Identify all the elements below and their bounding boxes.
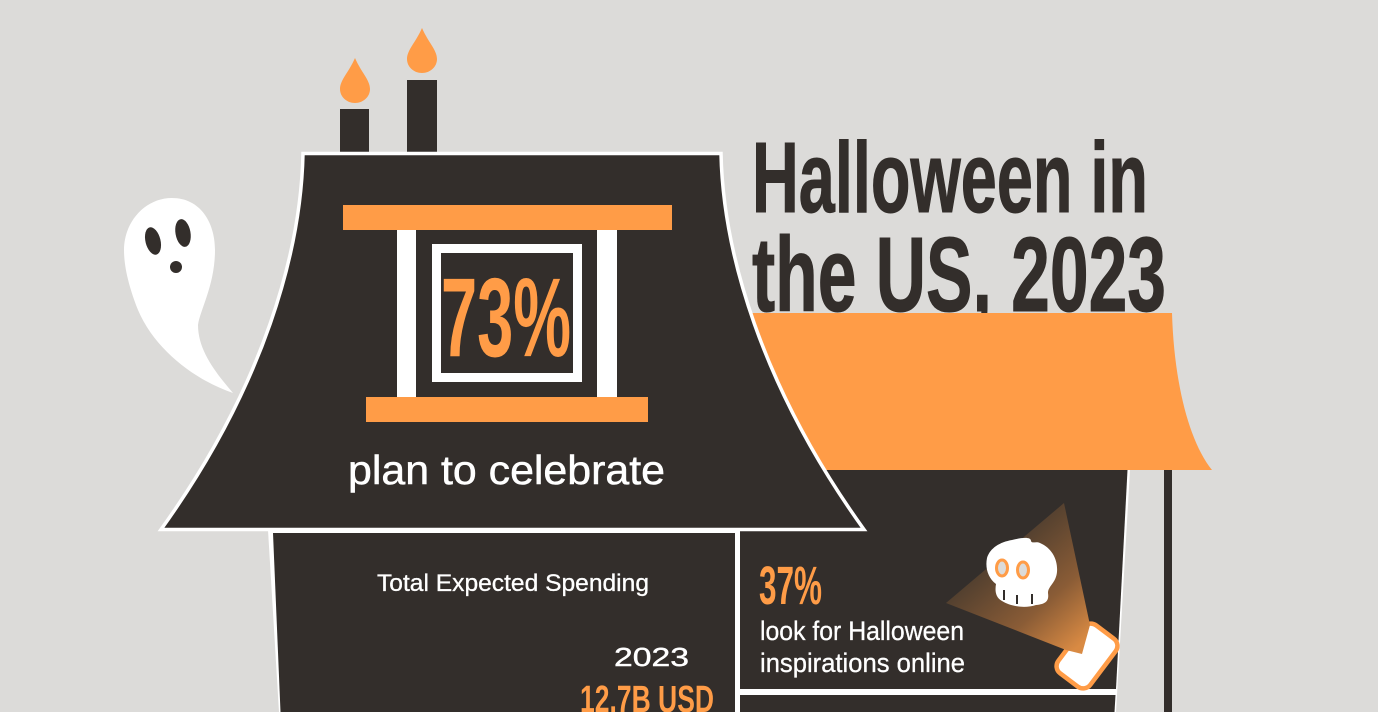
phone [1053, 620, 1121, 692]
panel: house lower right [737, 470, 1130, 712]
icon: ghost [124, 198, 233, 393]
title: the US, 2023 [752, 216, 1166, 334]
spending 2023 value [580, 642, 714, 712]
chimney left [340, 109, 369, 152]
inspirations text: inspirations online [760, 648, 965, 678]
awning pole [1164, 470, 1172, 712]
icon: flame left [340, 58, 370, 103]
window frame with 73% [343, 205, 672, 422]
spending heading: Total Expected Spending [377, 570, 649, 597]
inspirations text: look for Halloween [760, 616, 964, 646]
inspirations text [760, 616, 965, 678]
title [752, 122, 1166, 334]
icon: flame right [407, 28, 437, 73]
chimney right [407, 80, 437, 152]
plan to celebrate label: plan to celebrate [348, 447, 665, 493]
title: Halloween in [752, 122, 1148, 234]
awning [740, 313, 1212, 470]
37% statistic: 37% [759, 556, 822, 616]
panel: total expected spending [268, 530, 740, 712]
skull [986, 538, 1057, 607]
spending 2023 value: 2023 [614, 642, 689, 672]
light beam [946, 503, 1090, 654]
73% statistic: 73% [441, 255, 571, 380]
icon: phone projecting skull [946, 503, 1121, 692]
roof [161, 154, 864, 530]
